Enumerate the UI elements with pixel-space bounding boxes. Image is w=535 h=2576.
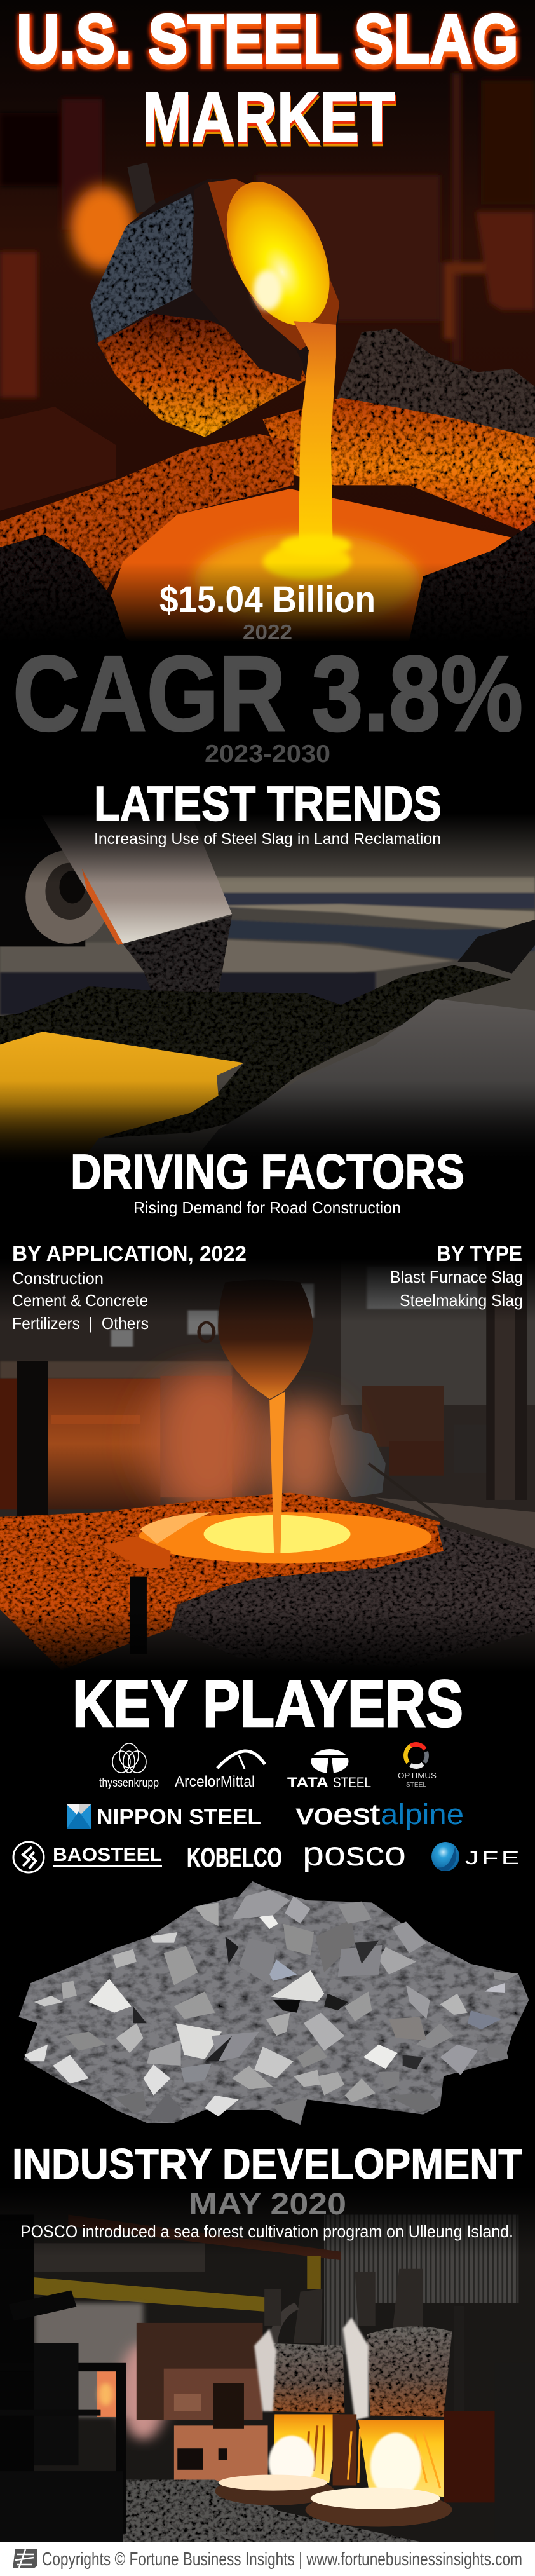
logo: Optimus Steel	[398, 1740, 437, 1789]
heading: by application: BY APPLICATION, 2022	[12, 1242, 247, 1266]
sub: grey slag rocks	[337, 328, 535, 438]
title: Market: MARKET	[143, 81, 396, 159]
panel: segmentation by application	[12, 1242, 247, 1333]
logo: Nippon Steel: NIPPON STEEL	[97, 1805, 261, 1829]
sub: first molten dish	[215, 2477, 334, 2505]
item: fertilizers and others: Fertilizers | Others	[12, 1314, 149, 1333]
logo: voestalpine	[296, 1798, 464, 1830]
photo: slag pouring into pit in workshop	[0, 1258, 535, 1692]
sub: right dark framework	[495, 2363, 535, 2542]
panel: latest trends	[94, 777, 442, 848]
item: construction: Construction	[12, 1269, 104, 1288]
panel: market title and figures	[13, 0, 523, 768]
panel: driving factors	[71, 1145, 464, 1217]
item: cement and concrete: Cement & Concrete	[12, 1291, 148, 1310]
logo: ArcelorMittal: ArcelorMittal	[175, 1773, 255, 1790]
heading: driving factors: DRIVING FACTORS	[71, 1145, 464, 1199]
heading: key players: KEY PLAYERS	[72, 1667, 463, 1741]
sub: floor slag	[123, 2480, 423, 2542]
title: Market: MARKET	[143, 83, 396, 161]
panel: industry development	[12, 2140, 522, 2241]
sub: glowing lava bank left	[0, 434, 294, 598]
footer	[0, 2542, 535, 2576]
sub: dark slag rocks	[170, 1524, 535, 1668]
sub: slag pit rim	[0, 1493, 444, 1670]
logo: voestalpine: voest	[296, 1798, 381, 1830]
logo: thyssenkrupp: thyssenkrupp	[99, 1776, 159, 1790]
item: steelmaking slag: Steelmaking Slag	[400, 1291, 523, 1310]
logo: Baosteel	[13, 1842, 162, 1872]
sub: glowing lava bank right	[262, 398, 535, 536]
sub: ladle body	[90, 179, 339, 437]
sub: worker	[329, 1414, 386, 1497]
sub: white steam	[254, 2329, 276, 2411]
sub: floor	[376, 1497, 535, 1549]
sub: truck bucket	[41, 815, 232, 944]
sub: grey road surface	[191, 999, 535, 1164]
sub: asphalt pile	[0, 965, 512, 1138]
sub: second fire	[444, 2411, 495, 2502]
base year: 2022	[243, 620, 292, 644]
logo: Tata Steel: STEEL	[333, 1775, 371, 1790]
photo: molten slag pouring from ladle	[0, 0, 535, 674]
sub: first fire	[273, 2414, 339, 2483]
sub: dark rock corners	[0, 535, 137, 671]
sub: pouring stream	[294, 321, 336, 543]
logo: Optimus Steel: STEEL	[406, 1782, 426, 1789]
sub: falling asphalt	[123, 915, 232, 996]
logo: Tata Steel	[287, 1749, 371, 1790]
photo: steel plant ladles pouring	[0, 2186, 535, 2542]
sub: pool of molten slag	[102, 489, 522, 671]
sub: right pillar and bench	[362, 1386, 444, 1447]
driver text: Rising Demand for Road Construction	[133, 1198, 401, 1217]
sub: black post	[130, 1577, 147, 1654]
item: blast furnace slag: Blast Furnace Slag	[390, 1267, 523, 1286]
logo: thyssenkrupp	[99, 1743, 159, 1790]
icon: Fortune Business Insights logo	[13, 2549, 37, 2568]
sub: pouring stream	[269, 1392, 285, 1553]
sub: orange cabinet	[43, 1379, 160, 1509]
logo: JFE: JFE	[465, 1848, 522, 1869]
sub: orange smoke	[150, 1368, 266, 1515]
date: May 2020: MAY 2020	[189, 2188, 346, 2221]
sub: yellow road marking	[0, 1032, 244, 1161]
sub: second ladle	[393, 2269, 423, 2331]
sub: left dark framework	[0, 2215, 34, 2542]
title: Market: MARKET	[142, 78, 395, 156]
photo: road paving with asphalt	[0, 812, 535, 1169]
market size value: $15.04 Billion	[159, 579, 376, 620]
logo: JFE	[431, 1842, 522, 1871]
logo: Tata Steel: TATA	[287, 1775, 328, 1790]
sub: corrugated wall	[324, 2215, 518, 2303]
sub: hanging ladle	[218, 1280, 313, 1399]
sub: rust machinery	[137, 2323, 262, 2420]
heading: latest trends: LATEST TRENDS	[94, 777, 442, 831]
forecast period: 2023-2030	[205, 740, 330, 768]
sub: truck wheel	[0, 812, 85, 946]
logo: voestalpine: alpine	[381, 1798, 464, 1830]
panel: segmentation by type	[390, 1242, 523, 1310]
logo: Baosteel: BAOSTEEL	[53, 1844, 162, 1865]
sub: dark pit left	[0, 407, 116, 511]
sub: second molten dish	[306, 2493, 452, 2527]
logo: Optimus Steel: OPTIMUS	[398, 1771, 437, 1780]
trend text: Increasing Use of Steel Slag in Land Reclamation	[94, 830, 441, 848]
logo: Kobelco: KOBELCO	[187, 1843, 282, 1873]
sub: first ladle	[294, 2289, 322, 2343]
panel: key players	[13, 1667, 522, 1873]
heading: by type: BY TYPE	[437, 1242, 522, 1266]
sub: hazy background machinery	[34, 2303, 144, 2417]
photo: pile of steel slag	[19, 1881, 529, 2125]
logo: Posco: posco	[302, 1835, 406, 1873]
logo: ArcelorMittal	[175, 1751, 265, 1790]
sub: yellow beams	[34, 2277, 266, 2312]
